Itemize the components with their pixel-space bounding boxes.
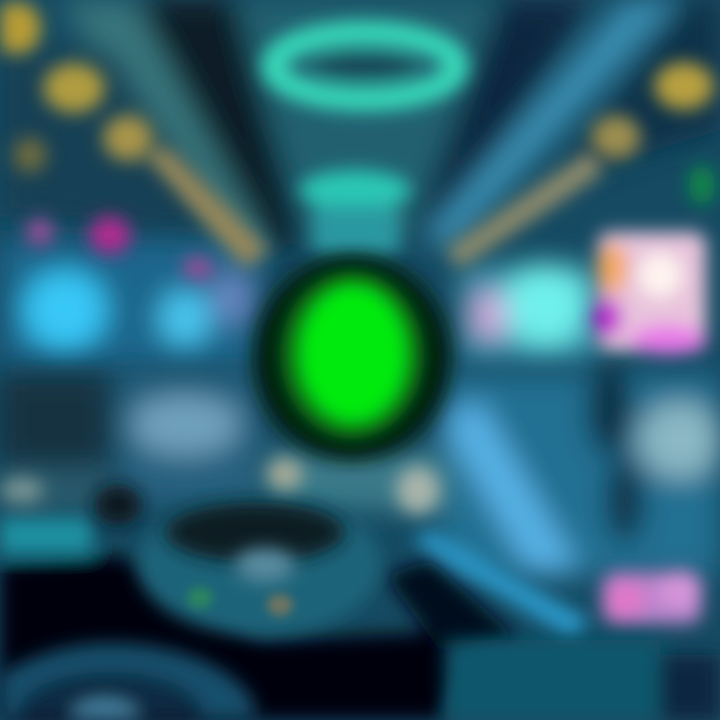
ceiling lamps — [0, 2, 714, 173]
lower room tones — [0, 364, 720, 575]
bottom dark floor — [0, 478, 520, 720]
left amber light strip — [140, 148, 270, 268]
left wall screens — [0, 240, 260, 365]
teal ring on ceiling — [273, 33, 457, 99]
colourful right screen — [594, 165, 715, 355]
central green orb — [254, 256, 450, 460]
magenta left highlights — [26, 216, 213, 279]
light streak lower right — [412, 530, 590, 640]
orb mid glow — [280, 271, 424, 439]
bottom right console — [445, 640, 720, 720]
orb dark rim — [254, 256, 450, 460]
orb core — [298, 284, 408, 424]
right wall screens — [460, 263, 600, 360]
small beige lights above console — [267, 458, 440, 514]
bottom left round console — [0, 643, 255, 720]
pink lower right screen — [602, 570, 702, 624]
teal lower emitter — [299, 170, 411, 255]
console dome — [94, 485, 382, 635]
right amber light strip — [445, 150, 605, 268]
ceiling panels — [0, 0, 720, 250]
